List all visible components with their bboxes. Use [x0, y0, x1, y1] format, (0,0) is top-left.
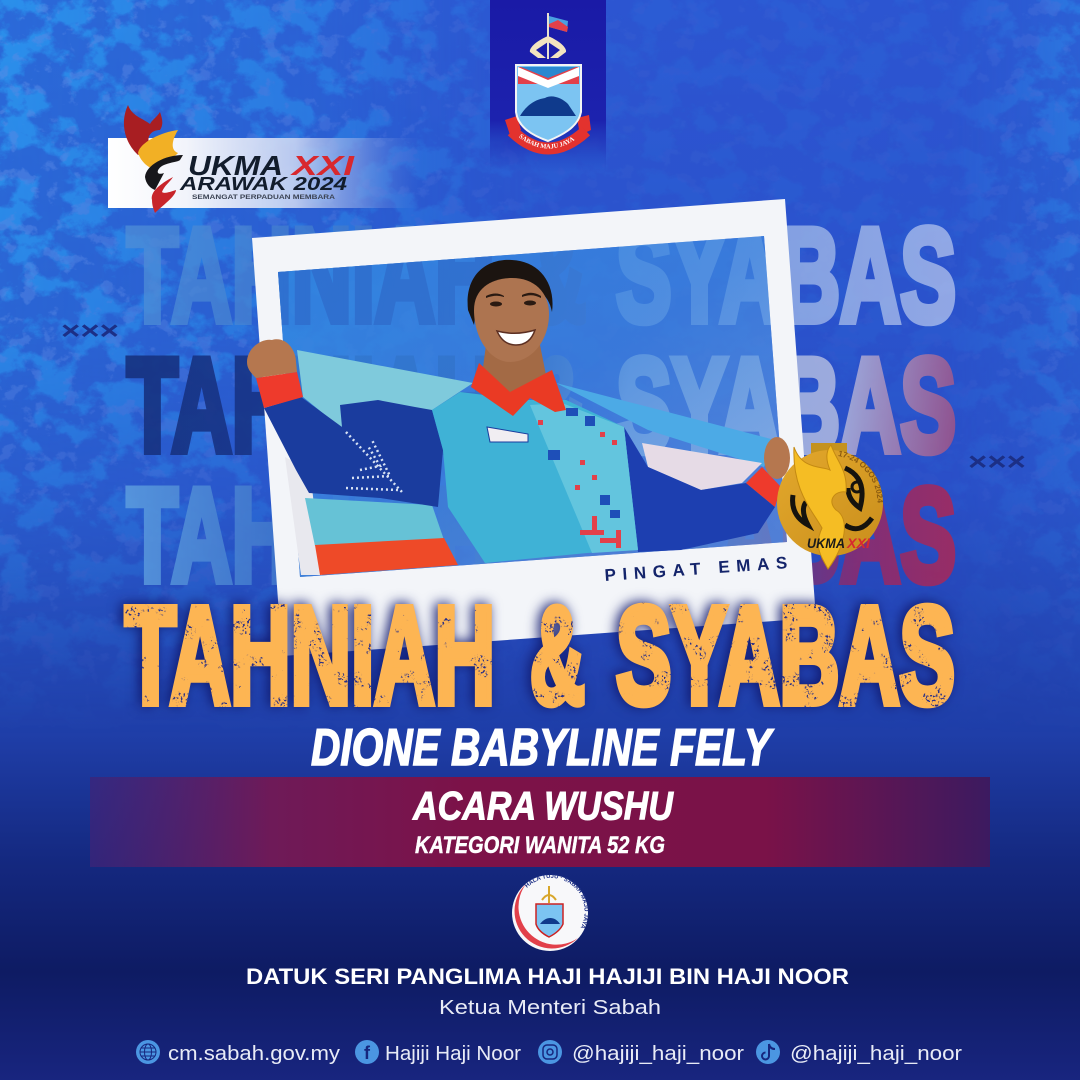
left sleeve [264, 397, 443, 507]
medal ribbon loop [811, 443, 847, 455]
icon: instagram [538, 1040, 562, 1064]
ribbon [512, 131, 586, 148]
instagram handle: @hajiji_haji_noor [572, 1043, 744, 1065]
left fist [247, 339, 297, 378]
sleeve pattern [346, 432, 402, 492]
icon: tiktok [756, 1040, 780, 1064]
ghost text row 3: TAHNIAH [127, 462, 495, 610]
ghost text seen through window: TAHNIAH [127, 202, 495, 350]
decorative x marks right: ××× [968, 448, 1026, 476]
ghost text seen through window: & [528, 202, 586, 350]
ghost text row 1: TAHNIAH [127, 202, 495, 350]
jersey panel [530, 403, 638, 553]
flag left upper [297, 350, 473, 427]
logo arms [542, 886, 556, 903]
chief minister title: Ketua Menteri Sabah [439, 996, 661, 1019]
ghost text seen through window [278, 250, 586, 326]
contact row [136, 1040, 962, 1065]
facebook name: Hajiji Haji Noor [385, 1043, 521, 1065]
logo torch flame [124, 105, 162, 155]
right hand [764, 437, 790, 479]
medal disc [777, 450, 883, 556]
crest motto: SABAH MAJU JAYA [519, 134, 575, 148]
jersey [432, 392, 638, 563]
logo ring blue [519, 884, 578, 947]
shield chevron [518, 67, 579, 84]
crest arms [530, 36, 566, 58]
ribbon ends [505, 115, 591, 135]
website: cm.sabah.gov.my [168, 1043, 340, 1065]
logo: Hala Tuju [512, 874, 588, 951]
icon: globe [136, 1040, 160, 1064]
event band [90, 777, 990, 867]
ghost text row 1: & [528, 202, 586, 350]
logo wordmark line 2: ARAWAK 2024 [179, 174, 347, 194]
logo wordmark line 1: UKMA [188, 150, 283, 181]
caption: pingat emas: PINGAT EMAS [604, 553, 791, 585]
main title: & [530, 579, 585, 733]
hair [468, 260, 553, 325]
icon: facebook: f [364, 1043, 371, 1063]
smile [497, 330, 535, 345]
event category: KATEGORI WANITA 52 KG [415, 832, 665, 859]
ghost text row 2: TAHNIAH [127, 332, 495, 480]
photo frame [252, 199, 815, 656]
logo tagline: SEMANGAT PERPADUAN MEMBARA [192, 195, 336, 201]
ghost text rows [127, 202, 956, 610]
mountain [520, 96, 576, 116]
logo shield [536, 904, 563, 937]
white frame [252, 199, 816, 656]
logo torch gold [138, 130, 178, 170]
crest flag [549, 16, 568, 32]
flag right lower white [642, 443, 762, 490]
event title: ACARA WUSHU [412, 784, 674, 828]
shield [516, 65, 581, 141]
ghost text row 2: & [528, 332, 586, 480]
medal caption: UKMA [807, 535, 845, 551]
crest band [490, 0, 606, 172]
logo shield mountain [540, 918, 560, 924]
flag right upper [556, 383, 775, 467]
photo window tint [278, 236, 787, 577]
logo S [145, 155, 183, 190]
flag left lower [285, 457, 458, 575]
medal [777, 443, 883, 570]
chest flag [487, 427, 528, 442]
right cuff [746, 467, 781, 507]
medal caption: XXI [846, 535, 871, 551]
logo disc [512, 875, 588, 951]
logo ring red [515, 884, 578, 948]
medal tribal pattern [793, 468, 872, 529]
main title: TAHNIAH [125, 579, 495, 733]
medal caption [807, 535, 871, 551]
tiktok handle: @hajiji_haji_noor [790, 1043, 962, 1065]
decorative x marks left: ××× [61, 317, 119, 345]
medal ring date: 17-24 OGOS 2024 [838, 451, 883, 503]
chief minister name: DATUK SERI PANGLIMA HAJI HAJIJI BIN HAJI NOOR [246, 964, 849, 989]
eyes [486, 293, 541, 306]
left cuff [256, 372, 303, 408]
athlete name: DIONE BABYLINE FELY [311, 719, 774, 777]
logo banner [108, 138, 420, 208]
right sleeve [624, 427, 775, 552]
face [474, 278, 549, 362]
icon: facebook [355, 1040, 379, 1064]
flagpole [547, 13, 549, 59]
collar [471, 363, 566, 416]
logo: Sukma XXI Sarawak 2024 [108, 105, 420, 213]
neck [482, 345, 548, 398]
ghost text row 3: & [528, 462, 586, 610]
logo ring text: HALA TUJU · SABAH MAJU JAYA [524, 874, 588, 928]
crest: Sabah coat of arms [505, 13, 591, 154]
athlete photo [247, 260, 790, 575]
medal flame [794, 445, 846, 569]
logo XXI: XXI [289, 150, 356, 181]
